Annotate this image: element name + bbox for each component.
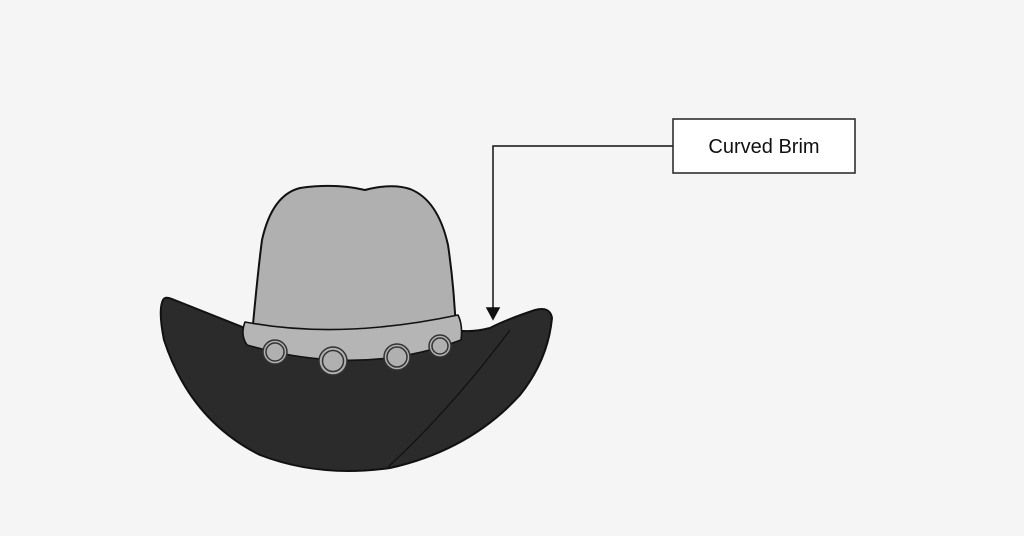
hat brim — [161, 298, 552, 471]
callout arrow — [487, 146, 673, 319]
hat crown — [252, 186, 456, 339]
hat band — [243, 315, 462, 360]
label: Curved Brim: Curved Brim — [708, 136, 820, 158]
label: Curved Brim — [673, 119, 855, 173]
brim fold line — [388, 330, 510, 467]
hat illustration — [161, 186, 552, 471]
studs — [263, 335, 451, 375]
